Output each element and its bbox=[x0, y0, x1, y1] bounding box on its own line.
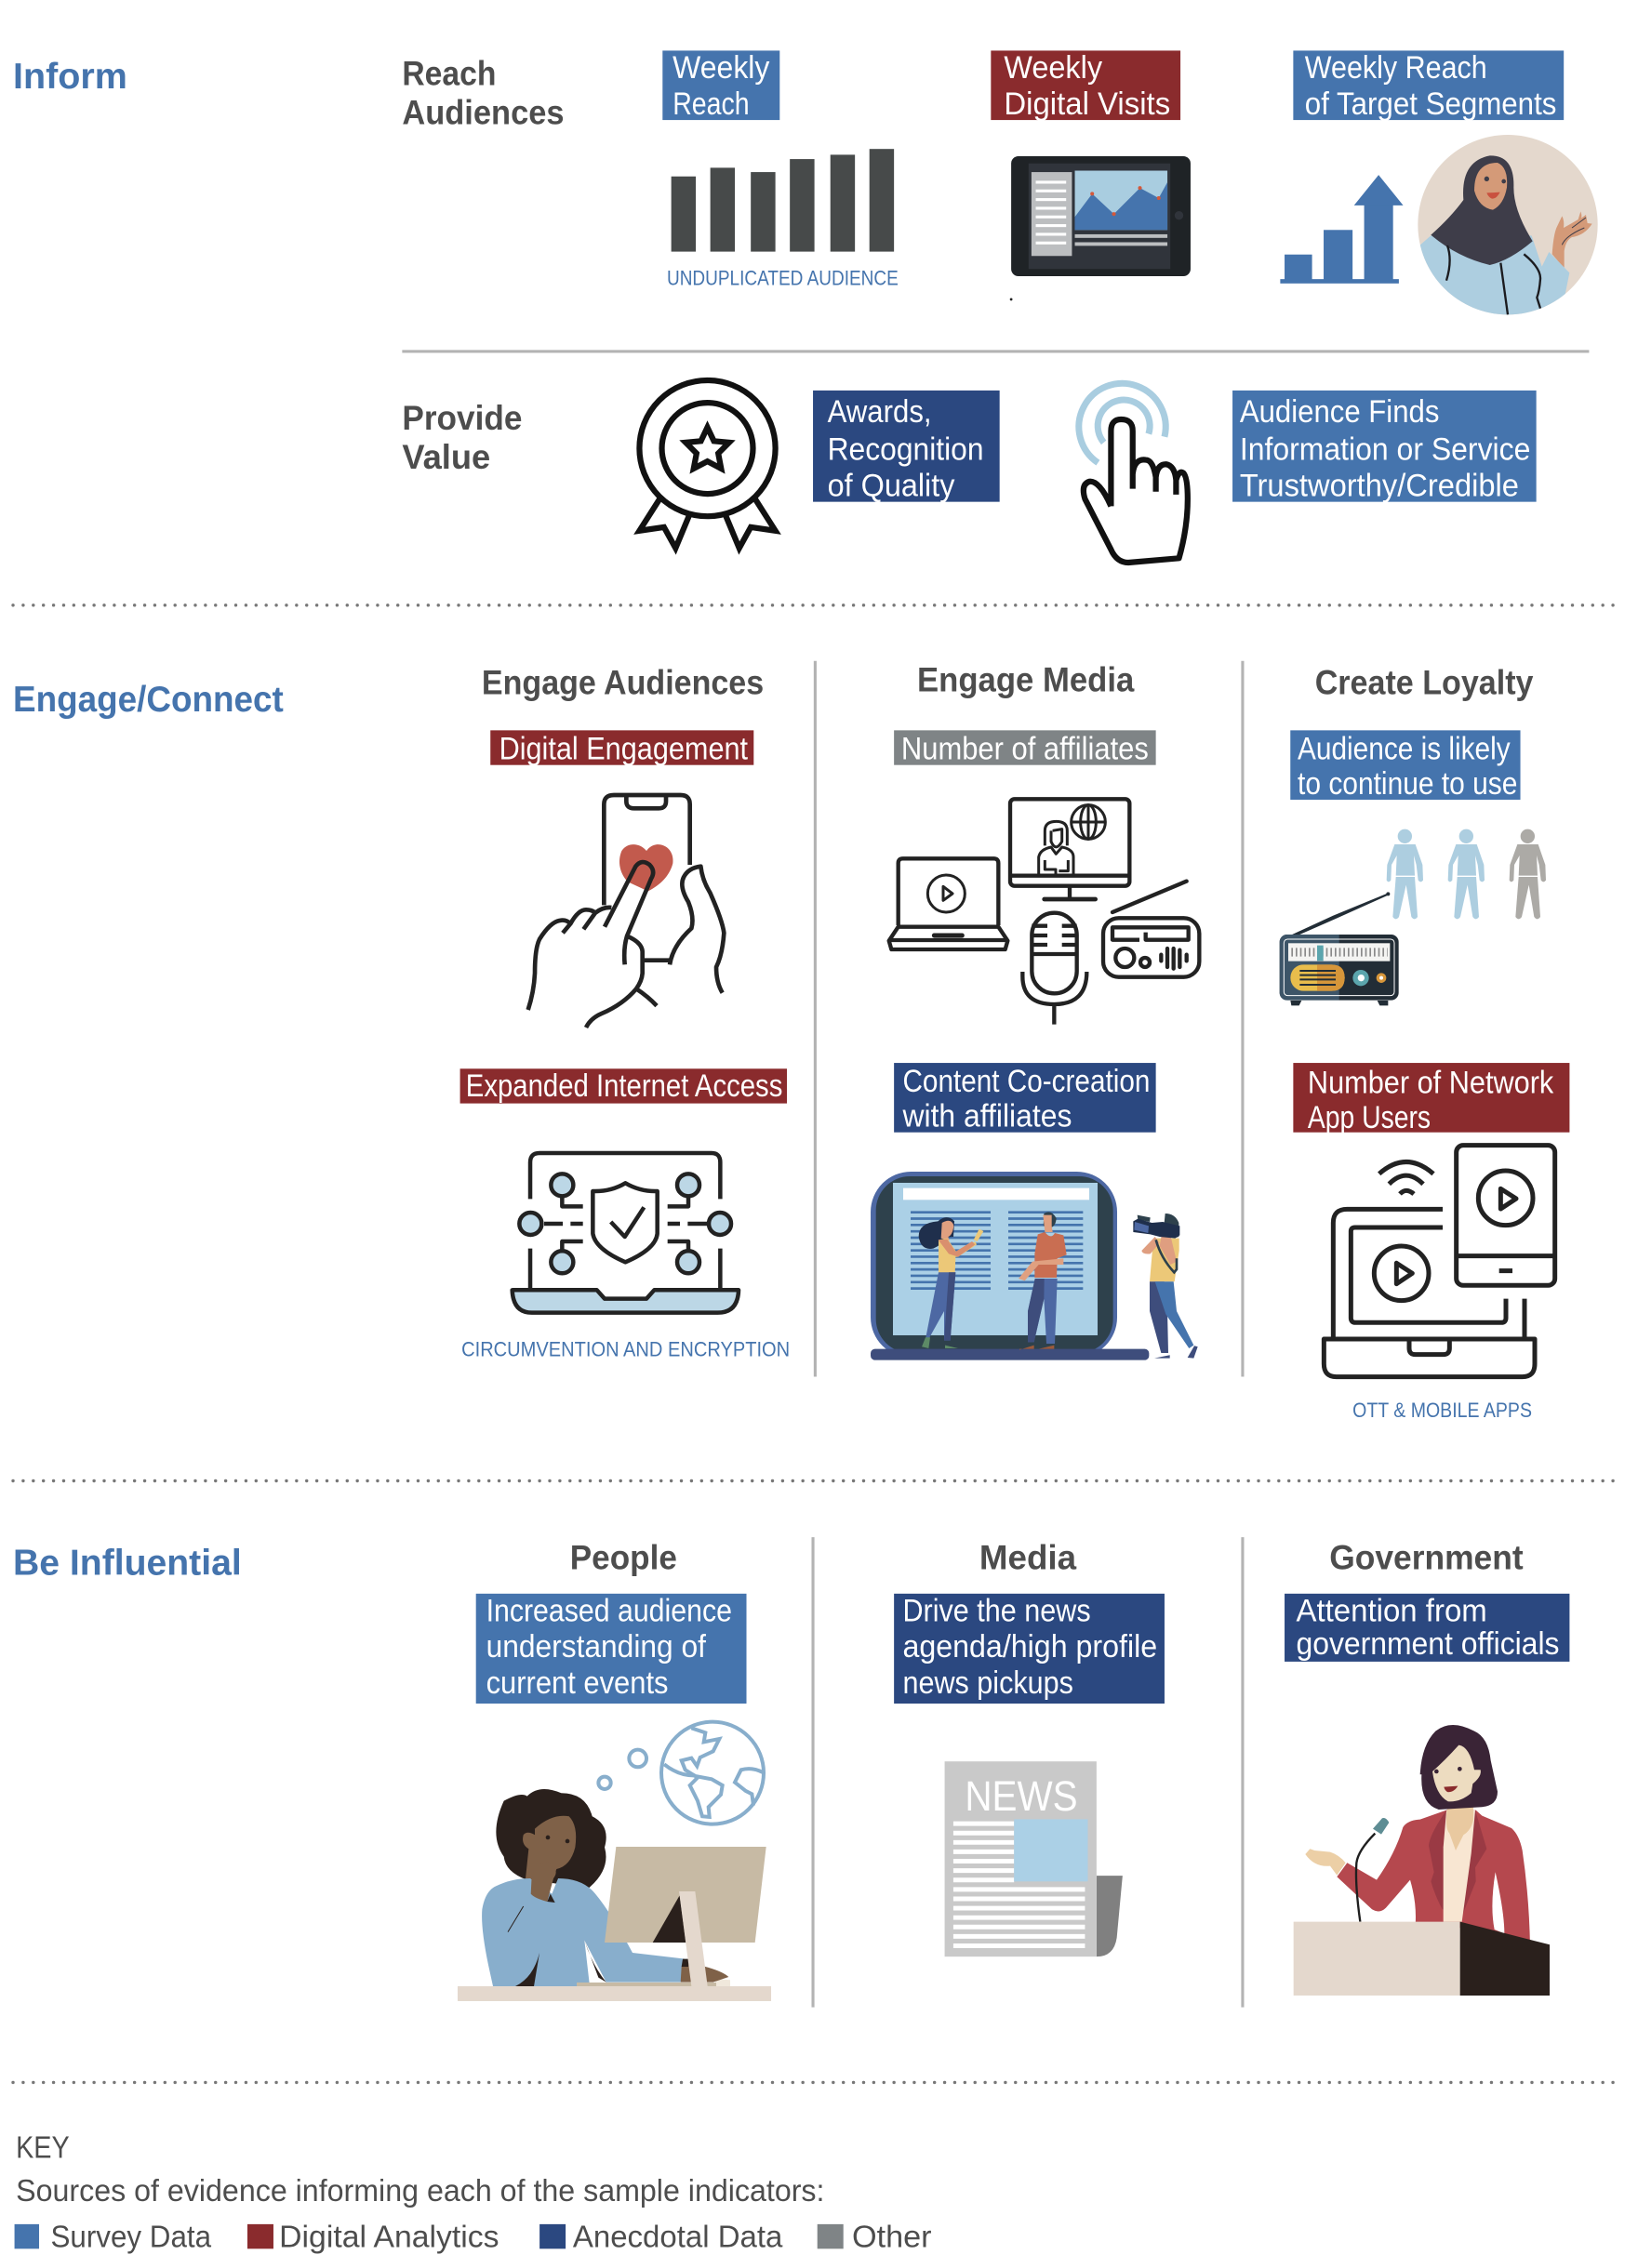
heading: Inform: Inform bbox=[13, 57, 127, 97]
indicator: Awards, Recognition of Quality: of Quality bbox=[828, 468, 955, 503]
indicator: Weekly Reach of Target Segments: of Target Segments bbox=[1305, 86, 1556, 122]
legend item: other: Other bbox=[852, 2221, 932, 2255]
indicator: Weekly Reach of Target Segments: Weekly Reach bbox=[1305, 50, 1487, 86]
indicator: Weekly Reach of Target Segments bbox=[1293, 50, 1564, 122]
stray mark bbox=[1010, 298, 1013, 300]
indicator: Weekly Digital Visits: Weekly bbox=[1004, 50, 1103, 86]
indicator: Weekly Reach: Weekly bbox=[673, 50, 770, 86]
subheading: Government: Government bbox=[1329, 1537, 1524, 1576]
caption: circumvention and encryption: CIRCUMVENTION AND ENCRYPTION bbox=[461, 1338, 790, 1361]
subheading: Reach Audiences: Audiences bbox=[402, 93, 565, 132]
indicator: Drive the news agenda: news pickups bbox=[902, 1665, 1073, 1701]
indicator: Audience Finds Information or Service Trustworthy/Credible: Trustworthy/Credible bbox=[1240, 468, 1519, 503]
subheading: Reach Audiences: Reach bbox=[402, 54, 496, 93]
icon: media devices bbox=[889, 799, 1199, 1025]
subheading: Media: Media bbox=[979, 1537, 1076, 1576]
indicator: Drive the news agenda: agenda/high profile bbox=[902, 1629, 1157, 1665]
indicator: Awards, Recognition of Quality: Recognition bbox=[828, 432, 984, 468]
indicator: Attention from government officials: government officials bbox=[1296, 1626, 1560, 1662]
indicator: Increased audience understanding: current events bbox=[486, 1665, 669, 1701]
indicator: Audience Finds Information or Service Trustworthy/Credible: Audience Finds bbox=[1240, 394, 1439, 430]
icon: secured laptop network bbox=[513, 1153, 739, 1313]
subheading: Provide Value bbox=[402, 398, 522, 476]
indicator: Attention from government officials: Attention from bbox=[1296, 1593, 1487, 1628]
illustration: radio and three audience figures bbox=[1280, 829, 1546, 1005]
indicator: Expanded Internet Access: Expanded Internet Access bbox=[466, 1068, 782, 1104]
indicator: Increased audience understanding: Increased audience bbox=[486, 1593, 732, 1628]
subheading: Provide Value: Value bbox=[402, 437, 490, 476]
subheading: Create Loyalty: Create Loyalty bbox=[1315, 662, 1534, 701]
indicator: Drive the news agenda bbox=[894, 1593, 1165, 1704]
indicator: Number of Network App Users bbox=[1293, 1063, 1569, 1135]
icon: award rosette bbox=[639, 380, 776, 548]
indicator: Number of Network App Users: Number of Network bbox=[1308, 1066, 1554, 1101]
legend item: anecdotal data: Anecdotal Data bbox=[573, 2221, 783, 2255]
subheading: Engage Audiences: Engage Audiences bbox=[482, 662, 764, 701]
illustration: person thinking at computer bbox=[458, 1722, 771, 2001]
icon: laptop and tablet with video bbox=[1324, 1146, 1555, 1377]
indicator: Number of affiliates: Number of affiliates bbox=[901, 731, 1149, 766]
illustration: reporters and camera operator at screen bbox=[871, 1172, 1198, 1360]
indicator: Audience is likely to continue to use: Audience is likely bbox=[1298, 731, 1511, 766]
newspaper title: NEWS bbox=[965, 1772, 1078, 1820]
indicator: Weekly Digital Visits bbox=[991, 50, 1180, 122]
indicator: Weekly Digital Visits: Digital Visits bbox=[1004, 86, 1170, 122]
caption: unduplicated audience: UNDUPLICATED AUDIENCE bbox=[667, 266, 899, 289]
subheading: Provide Value: Provide bbox=[402, 398, 522, 437]
illustration: woman in hijab bbox=[1418, 135, 1598, 319]
indicator: Content Co-creation with affiliates: with affiliates bbox=[902, 1098, 1072, 1134]
indicator: Number of Network App Users: App Users bbox=[1308, 1100, 1431, 1135]
indicator: Content Co-creation with affiliates: Content Co-creation bbox=[902, 1064, 1150, 1099]
legend item: other bbox=[818, 2221, 932, 2255]
indicator: Weekly Reach: Reach bbox=[673, 86, 750, 122]
legend title: KEY bbox=[16, 2130, 70, 2165]
legend item: survey data: Survey Data bbox=[50, 2221, 211, 2255]
section: Engage/Connect bbox=[13, 659, 1569, 1422]
indicator: Increased audience understanding: understanding of bbox=[486, 1629, 706, 1665]
illustration: speaker at podium bbox=[1294, 1725, 1550, 1996]
icon: pointing hand with touch rings bbox=[1079, 383, 1188, 563]
heading: Be Influential: Be Influential bbox=[13, 1544, 242, 1584]
legend: key bbox=[15, 2130, 932, 2255]
indicator: Audience is likely to continue to use: to continue to use bbox=[1298, 766, 1517, 802]
heading: Engage/Connect: Engage/Connect bbox=[13, 680, 284, 720]
icon: hand tapping heart on phone bbox=[528, 795, 724, 1028]
indicator: Awards, Recognition of Quality: Awards, bbox=[828, 394, 932, 430]
section: Be Influential bbox=[13, 1537, 1569, 2008]
indicator: Awards, Recognition of Quality bbox=[813, 391, 1000, 503]
indicator: Increased audience understanding bbox=[476, 1593, 747, 1704]
divider: reach and value bbox=[402, 350, 1589, 352]
legend description: Sources of evidence informing each of the sample indicators: bbox=[16, 2174, 824, 2208]
indicator: Digital Engagement: Digital Engagement bbox=[499, 731, 749, 766]
indicator: Attention from government officials bbox=[1285, 1593, 1569, 1662]
icon: audience bar chart bbox=[672, 149, 894, 252]
subheading: Reach Audiences bbox=[402, 54, 565, 132]
icon: rising arrow chart bbox=[1280, 175, 1404, 284]
legend item: digital analytics: Digital Analytics bbox=[279, 2221, 499, 2255]
indicator: Weekly Reach bbox=[662, 50, 779, 122]
indicator: Audience Finds Information or Service Trustworthy/Credible: Information or Service bbox=[1240, 432, 1530, 468]
indicator: Content Co-creation with affiliates bbox=[894, 1063, 1156, 1134]
indicator: Drive the news agenda: Drive the news bbox=[902, 1593, 1091, 1628]
subheading: Engage Media: Engage Media bbox=[917, 659, 1135, 698]
illustration: newspaper bbox=[945, 1761, 1123, 1956]
subheading: People: People bbox=[570, 1537, 677, 1576]
indicator: Audience is likely to continue to use bbox=[1290, 730, 1521, 802]
caption: OTT and mobile apps: OTT & MOBILE APPS bbox=[1352, 1399, 1532, 1422]
section: Inform bbox=[13, 50, 1598, 563]
icon: tablet analytics bbox=[1011, 156, 1191, 276]
indicator: Audience Finds Information or Service Trustworthy/Credible bbox=[1232, 391, 1537, 503]
